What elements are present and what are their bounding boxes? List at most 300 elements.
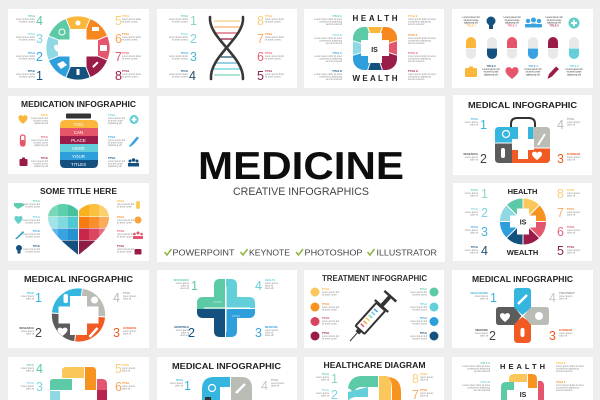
right text blocks: consectetur adipiscing — [408, 76, 431, 79]
heading: MEDICAL INFOGRAPHIC — [172, 362, 281, 371]
left labels and numbers: dolor sit — [470, 231, 478, 234]
panel: heart — [8, 183, 149, 261]
right icons and labels: TITLE — [108, 156, 115, 160]
left icons and labels: sit amet conse — [25, 221, 41, 224]
octagon diagram: IS — [371, 47, 378, 54]
left labels and numbers: dolor sit — [470, 194, 478, 197]
right icons and labels: TITLE — [420, 287, 427, 291]
left icons and labels: TITLE — [322, 287, 329, 291]
right icons and labels: adipiscing elit — [108, 122, 122, 125]
shape diagram — [202, 377, 252, 400]
right labels and numbers: TITLE — [123, 291, 130, 295]
left text blocks: sed do eiusmod — [326, 43, 343, 45]
left text blocks: sed do eiusmod — [326, 24, 343, 26]
jar diagram: CAN — [74, 130, 83, 135]
left text blocks: Lorem ipsum dolor sit amet — [314, 73, 342, 76]
left labels and numbers: dolor sit — [470, 158, 478, 161]
top row text and icons: adipiscing elit — [505, 22, 519, 25]
right labels and numbers — [557, 187, 580, 258]
panel: medical shape, cropped — [157, 357, 297, 400]
right labels and numbers: 6 — [115, 380, 122, 394]
right text blocks: sed do eiusmod — [408, 43, 425, 45]
left labels and numbers: MEDICINE — [475, 328, 488, 332]
jar diagram: TITLES — [71, 162, 86, 167]
right icons and labels: TITLE — [117, 244, 124, 248]
left icons and labels: TITLE — [33, 215, 40, 219]
left labels and numbers: sit amet consec — [172, 58, 189, 61]
left labels and numbers — [463, 117, 487, 166]
right icons and labels: Lorem ipsum dol — [410, 320, 427, 323]
left labels and numbers: TITLE — [27, 363, 34, 367]
right labels and numbers: Lorem ipsum — [420, 392, 433, 395]
top row text and icons: Lorem ipsum dol — [546, 16, 563, 19]
right icons and labels — [410, 287, 438, 340]
right labels and numbers: 3 — [113, 326, 120, 340]
left labels and numbers: 3 — [481, 225, 488, 239]
right labels and numbers: sit amet consec — [265, 76, 282, 79]
bottom row icons and text: Lorem ipsum dol — [525, 68, 542, 71]
right labels and numbers: dolor sit — [123, 332, 131, 335]
panel: eight-step wheel — [8, 9, 149, 88]
wheel diagram — [46, 16, 110, 80]
bottom row icons and text: Lorem ipsum dol — [566, 68, 583, 71]
left labels and numbers: Lorem ipsum — [465, 156, 478, 159]
left icons and labels: Lorem ipsum dol — [23, 248, 40, 251]
left labels and numbers: dolor sit — [181, 284, 189, 287]
right text blocks — [408, 14, 436, 81]
right labels and numbers: TITLE — [265, 14, 272, 18]
jar diagram: PLACE — [71, 138, 86, 143]
left icons and labels: sit amet conse — [322, 308, 338, 311]
left labels and numbers: 3 — [36, 32, 43, 46]
left icons and labels: Lorem ipsum dol — [23, 203, 40, 206]
heading: health: HEALTH — [508, 187, 537, 196]
right labels and numbers: Lorem ipsum dolor — [122, 73, 141, 76]
right label and number: dolor sit — [271, 384, 279, 387]
left labels and numbers: Lorem ipsum — [21, 367, 34, 370]
right labels and numbers: MEDICINE — [265, 325, 278, 329]
right text blocks: sed do eiusmod — [556, 390, 573, 392]
left icons and labels: adipiscing elit — [34, 165, 48, 168]
bottom row icons and text: adipiscing elit — [526, 73, 540, 76]
right icons and labels: TITLE — [108, 135, 115, 139]
heading: health: HEALTH — [500, 362, 545, 371]
right icons and labels: sit amet conse — [117, 250, 133, 253]
left text blocks: consectetur adipiscing — [319, 58, 343, 61]
panel: rounded plus — [157, 270, 297, 348]
right labels and numbers: 8 — [115, 69, 122, 83]
right labels and numbers: dolor sit — [122, 369, 130, 372]
right icons and labels: sit amet conse — [117, 205, 133, 208]
left labels and numbers: Lorem ipsum dolor — [16, 55, 35, 58]
panel: health is wealth octagon — [304, 9, 444, 88]
right icons and labels — [108, 113, 139, 168]
right labels and numbers: Lorem ipsum — [559, 295, 572, 298]
left text blocks: Lorem ipsum dolor sit amet — [462, 365, 490, 368]
right labels and numbers: Lorem ipsum dolor — [265, 73, 284, 76]
panel: four petals — [452, 270, 593, 348]
jar diagram: YOU — [74, 122, 83, 127]
left labels and numbers: 2 — [35, 326, 42, 340]
left labels and numbers: 1 — [331, 372, 338, 386]
right labels and numbers: TITLE — [122, 363, 129, 367]
circle diagram: IS — [520, 220, 527, 226]
right labels and numbers: Lorem ipsum dolor — [265, 55, 284, 58]
right icons and labels: TITLE — [420, 302, 427, 306]
heading: MEDICAL INFOGRAPHIC — [24, 275, 133, 284]
left labels and numbers: dolor sit — [470, 213, 478, 216]
left text blocks: TITLE B — [332, 33, 342, 37]
right labels and numbers: Lorem ipsum — [122, 367, 135, 370]
left labels and numbers: sit amet consec — [172, 39, 189, 42]
right labels and numbers: 8 — [557, 187, 564, 201]
right icons and labels: Lorem ipsum dol — [117, 203, 134, 206]
right icons and labels: adipiscing elit — [108, 165, 122, 168]
right labels and numbers: TITLE — [265, 32, 272, 36]
left labels and numbers: 1 — [36, 69, 43, 83]
right labels and numbers: dolor sit — [567, 123, 575, 126]
right text blocks: sed do eiusmod — [408, 61, 425, 63]
left icons and labels: Lorem ipsum dol — [23, 219, 40, 222]
left labels and numbers: TITLE — [181, 14, 188, 18]
right text blocks: sed do eiusmod — [408, 79, 425, 81]
left labels and numbers: dolor sit — [470, 251, 478, 254]
left icons and labels: adipiscing elit — [34, 122, 48, 125]
software list: KEYNOTE — [249, 248, 290, 258]
right labels and numbers: dolor sit — [559, 334, 567, 337]
left icons and labels: Lorem ipsum dol — [31, 160, 48, 163]
top row text and icons: Lorem ipsum dol — [463, 16, 480, 19]
bottom row icons and text: adipiscing elit — [567, 73, 581, 76]
left labels and numbers: 4 — [36, 14, 43, 28]
left labels and numbers: Lorem ipsum — [465, 229, 478, 232]
left labels and numbers: TITLE — [181, 51, 188, 55]
left labels and numbers: amet elit — [180, 287, 189, 290]
right icons and labels: TITLE — [420, 316, 427, 320]
left labels and numbers: Lorem ipsum dolor — [169, 55, 188, 58]
right text blocks: TITLE H — [408, 69, 418, 73]
panel: treatment syringe — [304, 270, 444, 348]
right labels and numbers: Lorem ipsum dolor — [122, 55, 141, 58]
left icons and labels: Lorem ipsum dol — [322, 320, 339, 323]
bottom row icons and text: sit amet conse — [567, 71, 582, 74]
left text blocks: consectetur adipiscing — [467, 387, 491, 390]
left labels and numbers: Lorem ipsum dolor — [169, 73, 188, 76]
right labels and numbers: Lorem ipsum dolor — [265, 36, 284, 39]
left labels and numbers: Lorem ipsum — [21, 385, 34, 388]
ribbon diagram — [348, 376, 401, 400]
right text blocks: Lorem ipsum dolor sit amet — [408, 73, 436, 76]
left labels and numbers: Lorem ipsum — [316, 392, 329, 395]
left text blocks: Lorem ipsum dolor sit amet — [462, 384, 490, 387]
right text blocks: Lorem ipsum dolor sit amet — [556, 365, 584, 368]
right labels and numbers: sit amet consec — [122, 39, 139, 42]
left labels and numbers: dolor sit — [321, 378, 329, 381]
right text blocks: TITLE E — [408, 14, 418, 18]
right text blocks: TITLE G — [408, 51, 418, 55]
right labels and numbers: TITLE — [420, 388, 427, 392]
left labels and numbers: Lorem ipsum — [465, 211, 478, 214]
left labels and numbers: dolor sit — [321, 394, 329, 397]
right text blocks: consectetur adipiscing — [408, 21, 431, 24]
right labels and numbers: 7 — [115, 50, 122, 64]
software list: POWERPOINT — [172, 248, 234, 258]
left labels and numbers: 3 — [190, 50, 197, 64]
petals diagram — [496, 288, 549, 343]
left icons and labels: TITLE — [33, 229, 40, 233]
right labels and numbers: Lorem ipsum — [265, 282, 278, 285]
right labels and numbers: TITLE — [122, 69, 129, 73]
left labels and numbers: TITLE — [28, 51, 35, 55]
left labels and numbers: Lorem ipsum — [21, 330, 34, 333]
heading: MEDICAL INFOGRAPHIC — [468, 101, 577, 110]
left labels and numbers: TITLE — [471, 188, 478, 192]
left icons and labels: TITLE — [41, 113, 48, 117]
heading: wealth: WEALTH — [507, 248, 538, 257]
right labels and numbers: TITLE — [567, 188, 574, 192]
left text blocks: sed do eiusmod — [474, 371, 491, 373]
left labels and numbers: sit amet consec — [19, 58, 36, 61]
right icons and labels: sit amet conse — [412, 322, 428, 325]
left icons and labels: sit amet conse — [25, 250, 41, 253]
right icons and labels: sit amet conse — [108, 119, 124, 122]
left labels and numbers — [465, 187, 488, 258]
right labels and numbers — [115, 14, 141, 83]
left labels and numbers: RESEARCH — [19, 326, 34, 330]
left icons and labels: TITLE — [322, 302, 329, 306]
left label and number: 1 — [184, 379, 191, 393]
left labels and numbers: TITLE — [27, 291, 34, 295]
right labels and numbers: 5 — [115, 14, 122, 28]
right labels and numbers: BUSINESS — [567, 152, 581, 156]
top row text and icons — [463, 16, 580, 29]
left icons and labels: sit amet conse — [33, 119, 49, 122]
left labels and numbers: sit amet consec — [19, 39, 36, 42]
left text blocks: sed do eiusmod — [474, 390, 491, 392]
left text blocks: Lorem ipsum dolor sit amet — [314, 18, 342, 21]
left icons and labels: Lorem ipsum dol — [31, 139, 48, 142]
left labels and numbers: INSURANCE — [174, 278, 189, 282]
right labels and numbers: TITLE — [122, 381, 129, 385]
panel: healthcare diagram, cropped — [304, 357, 444, 400]
left labels and numbers: RESEARCH — [463, 152, 478, 156]
left labels and numbers: Lorem ipsum — [176, 282, 189, 285]
left text blocks — [462, 361, 491, 392]
left icons and labels: Lorem ipsum dol — [31, 117, 48, 120]
right labels and numbers: Lorem ipsum — [567, 121, 580, 124]
right icons and labels: adipiscing elit — [108, 144, 122, 147]
subtitle: CREATIVE INFOGRAPHICS — [233, 186, 369, 198]
left icons and labels: TITLE — [33, 199, 40, 203]
left text blocks: consectetur adipiscing — [319, 21, 343, 24]
right labels and numbers: dolor sit — [265, 331, 273, 334]
left labels and numbers: TITLE — [471, 117, 478, 121]
right labels and numbers: 4 — [549, 291, 556, 305]
right labels and numbers: Lorem ipsum — [567, 249, 580, 252]
right labels and numbers: Lorem ipsum — [567, 229, 580, 232]
right labels and numbers: dolor sit — [123, 297, 131, 300]
right labels and numbers: TITLE — [122, 32, 129, 36]
left icons and labels: TITLE — [41, 135, 48, 139]
left icons and labels: sit amet conse — [33, 162, 49, 165]
right icons and labels: Lorem ipsum dol — [108, 117, 125, 120]
left labels and numbers — [470, 291, 497, 343]
top row text and icons: sit amet conse — [547, 19, 562, 22]
left labels and numbers — [316, 372, 338, 400]
right icons and labels: sit amet conse — [108, 162, 124, 165]
right labels and numbers — [115, 362, 135, 394]
left icons and labels: Lorem ipsum dol — [322, 335, 339, 338]
right labels and numbers: TREATMENT — [559, 291, 575, 295]
left text blocks: TITLE C — [332, 51, 342, 55]
right labels and numbers: dolor sit — [122, 387, 130, 390]
right labels and numbers: sit amet consec — [122, 58, 139, 61]
left icons and labels: Lorem ipsum dol — [23, 233, 40, 236]
left labels and numbers: 1 — [490, 291, 497, 305]
right labels and numbers: amet elit — [265, 334, 274, 337]
panel: pills row — [452, 9, 593, 88]
right labels and numbers: Lorem ipsum — [559, 332, 572, 335]
left labels and numbers: 1 — [190, 14, 197, 28]
left text blocks: TITLE D — [332, 69, 342, 73]
left labels and numbers: TITLE — [28, 14, 35, 18]
right labels and numbers: Lorem ipsum — [123, 330, 136, 333]
right text blocks: TITLE F — [408, 33, 418, 37]
right icons and labels: Lorem ipsum dol — [108, 160, 125, 163]
ring diagram — [50, 367, 107, 400]
right labels and numbers: TITLE — [567, 117, 574, 121]
right labels and numbers: Lorem ipsum — [122, 385, 135, 388]
left labels and numbers: 2 — [190, 32, 197, 46]
right icons and labels: sit amet conse — [412, 293, 428, 296]
panel: central title — [157, 96, 445, 262]
left labels and numbers: 2 — [36, 50, 43, 64]
left labels and numbers: dolor sit — [26, 297, 34, 300]
right icons and labels: sit amet conse — [108, 141, 124, 144]
right icons and labels: TITLE — [117, 199, 124, 203]
right labels and numbers: dolor sit — [559, 297, 567, 300]
left label and number: dolor sit — [175, 384, 183, 387]
left labels and numbers: Lorem ipsum — [465, 121, 478, 124]
left icons and labels: sit amet conse — [322, 293, 338, 296]
right labels and numbers: Lorem ipsum dolor — [122, 36, 141, 39]
left text blocks: sed do eiusmod — [326, 61, 343, 63]
left text blocks: TITLE A — [332, 14, 342, 18]
top row text and icons: TITLE 1 — [466, 24, 476, 28]
right labels and numbers: HEALTH — [265, 278, 275, 282]
heading: MEDICAL INFOGRAPHIC — [472, 275, 573, 284]
left text blocks — [314, 14, 343, 81]
right labels and numbers: TITLE — [420, 372, 427, 376]
right text blocks: sed do eiusmod — [408, 24, 425, 26]
pills — [466, 37, 579, 59]
left labels and numbers: TITLE — [28, 32, 35, 36]
left icons and labels — [14, 199, 41, 254]
left labels and numbers: 3 — [36, 380, 43, 394]
swirl circle diagram — [51, 288, 106, 342]
left labels and numbers: sit amet consec — [172, 21, 189, 24]
bottom row icons and text: adipiscing elit — [484, 73, 498, 76]
right icons and labels: Lorem ipsum dol — [410, 306, 427, 309]
right icons and labels: sit amet conse — [412, 308, 428, 311]
right labels and numbers: 7 — [557, 206, 564, 220]
left labels and numbers: 1 — [480, 118, 487, 132]
right text blocks: consectetur adipiscing — [556, 387, 579, 390]
jar diagram — [60, 114, 98, 168]
panel: four-part circle — [8, 270, 149, 348]
left labels and numbers: TITLE — [27, 381, 34, 385]
right labels and numbers: dolor sit — [265, 284, 273, 287]
left labels and numbers: dolor sit — [26, 387, 34, 390]
left text blocks: sed do eiusmod — [326, 79, 343, 81]
right labels and numbers: sit amet consec — [265, 21, 282, 24]
right labels and numbers: 5 — [257, 69, 264, 83]
left label and number: Lorem ipsum — [170, 382, 183, 385]
right icons and labels: Lorem ipsum dol — [117, 233, 134, 236]
right labels and numbers: TITLE — [567, 225, 574, 229]
right text blocks: consectetur adipiscing — [408, 58, 431, 61]
right labels and numbers: 8 — [257, 14, 264, 28]
top row text and icons: sit amet conse — [505, 19, 520, 22]
bottom row icons and text: sit amet conse — [526, 71, 541, 74]
bottom row icons and text: Lorem ipsum dol — [483, 68, 500, 71]
right labels and numbers — [113, 291, 137, 340]
top row text and icons: adipiscing elit — [547, 22, 561, 25]
right label and number: Lorem ipsum — [271, 382, 284, 385]
top row text and icons: TITLE 3 — [507, 24, 517, 28]
left text blocks: consectetur adipiscing — [319, 76, 343, 79]
left label and number: TITLE — [176, 378, 183, 382]
right icons and labels: sit amet conse — [117, 221, 133, 224]
right labels and numbers: Lorem ipsum — [567, 192, 580, 195]
left labels and numbers: Lorem ipsum dolor — [169, 36, 188, 39]
right labels and numbers: sit amet consec — [122, 76, 139, 79]
right text blocks: TITLE E — [556, 361, 566, 365]
right icons and labels: TITLE — [108, 113, 115, 117]
right text blocks: Lorem ipsum dolor sit amet — [408, 18, 436, 21]
main title: MEDICINE — [198, 145, 404, 188]
syringe — [343, 289, 398, 347]
right labels and numbers: 6 — [115, 32, 122, 46]
right text blocks: Lorem ipsum dolor sit amet — [408, 55, 436, 58]
right text blocks: TITLE F — [556, 380, 566, 384]
ring diagram: IS — [520, 392, 527, 399]
left labels and numbers: sit amet consec — [172, 76, 189, 79]
right labels and numbers: BUSINESS — [559, 328, 573, 332]
right labels and numbers: dolor sit — [567, 231, 575, 234]
left labels and numbers: TITLE — [181, 69, 188, 73]
left text blocks: consectetur adipiscing — [319, 40, 343, 43]
right labels and numbers: 3 — [549, 329, 556, 343]
panel: medical briefcase — [453, 95, 592, 175]
right labels and numbers: Lorem ipsum — [420, 376, 433, 379]
left text blocks: consectetur adipiscing — [467, 368, 491, 371]
heading: HEALTHCARE DIAGRAM — [324, 361, 426, 370]
left labels and numbers: TITLE — [471, 225, 478, 229]
left labels and numbers: Lorem ipsum — [465, 192, 478, 195]
right text blocks — [556, 361, 584, 392]
left text blocks: Lorem ipsum dolor sit amet — [314, 37, 342, 40]
right labels and numbers: dolor sit — [567, 213, 575, 216]
left icons and labels: adipiscing elit — [34, 144, 48, 147]
right labels and numbers: BUSINESS — [123, 326, 137, 330]
right labels and numbers: TITLE — [265, 69, 272, 73]
left icons and labels: TITLE — [33, 244, 40, 248]
left labels and numbers: 4 — [189, 69, 196, 83]
right labels and numbers: dolor sit — [567, 158, 575, 161]
right labels and numbers: 8 — [412, 372, 419, 386]
left labels and numbers: HEALTHCARE — [470, 291, 488, 295]
